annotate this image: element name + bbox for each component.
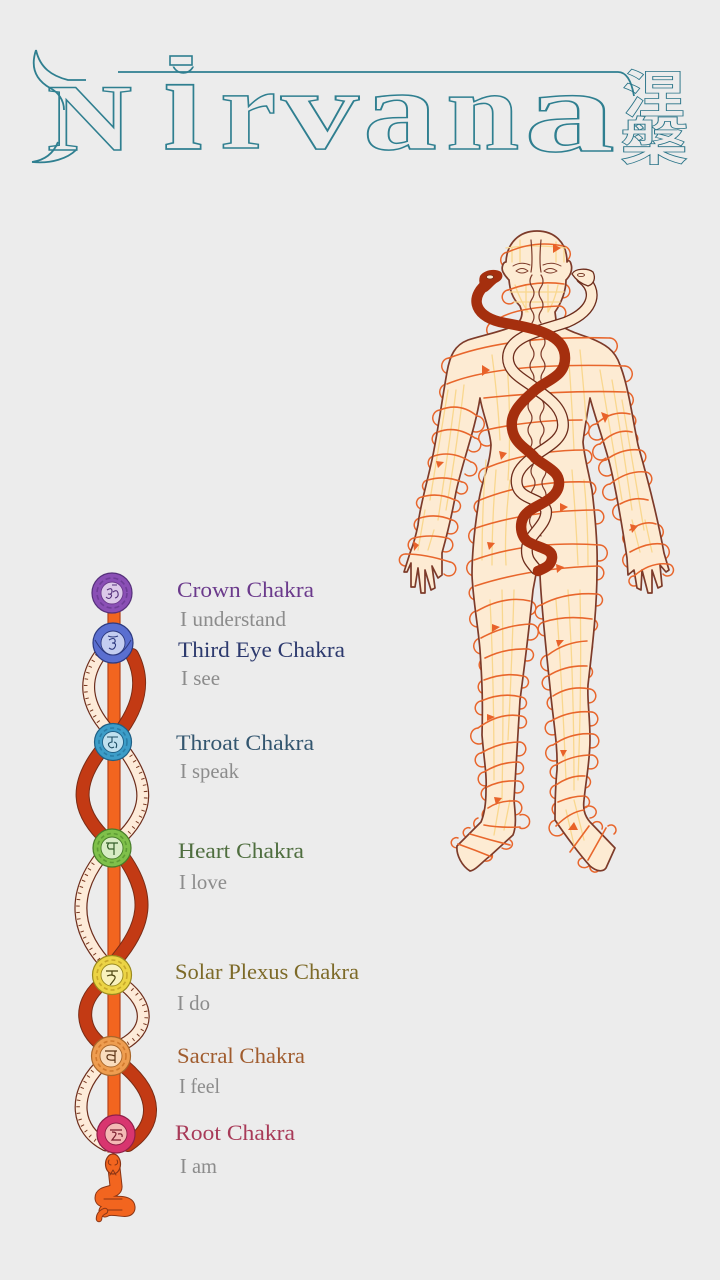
title: Chinese characters: 涅 (622, 53, 685, 128)
title: Nirvana (32, 50, 635, 164)
icon: heart chakra (93, 829, 131, 867)
orange flow arrows (413, 244, 638, 830)
title: Nirvana: N (47, 67, 132, 171)
body silhouette (404, 231, 669, 871)
chakra column (78, 573, 150, 1219)
orange coil lines (406, 244, 668, 860)
coil loops behind the body (399, 246, 673, 872)
label: crown chakra: Crown Chakra (177, 577, 314, 602)
label: throat chakra: I speak (180, 759, 239, 783)
title: Nirvana: r (220, 48, 276, 173)
icon: third eye chakra (93, 623, 133, 663)
figure: human body with energy channels (399, 231, 673, 872)
icon: throat chakra (94, 724, 132, 760)
central channel (528, 240, 546, 536)
label: heart chakra: I love (179, 870, 227, 894)
label: root chakra: I am (180, 1154, 217, 1178)
dark strands (83, 655, 150, 1145)
label: solar plexus chakra: I do (177, 991, 210, 1015)
label: solar plexus chakra: Solar Plexus Chakra (175, 959, 359, 984)
light strands (81, 655, 143, 1145)
light snake (508, 269, 594, 569)
label: third eye chakra: Third Eye Chakra (178, 637, 345, 662)
yellow meridian lines (418, 240, 652, 845)
central channel bar (108, 600, 120, 1152)
icon: root chakra (97, 1115, 135, 1153)
label: throat chakra: Throat Chakra (176, 730, 314, 755)
dark snake (477, 270, 565, 571)
title: Nirvana: a (363, 47, 437, 174)
title: Chinese characters: 槃 (620, 101, 688, 175)
title: Chinese characters (620, 53, 688, 175)
label: crown chakra (177, 577, 314, 631)
label: root chakra: Root Chakra (175, 1120, 295, 1145)
label: throat chakra (176, 730, 314, 783)
label: sacral chakra: Sacral Chakra (177, 1043, 305, 1068)
title: Nirvana: v (281, 48, 360, 173)
label: third eye chakra: I see (181, 666, 220, 690)
label: solar plexus chakra (175, 959, 359, 1015)
icon: coiled serpent (99, 1154, 129, 1219)
label: heart chakra: Heart Chakra (178, 838, 304, 863)
label: third eye chakra (178, 637, 345, 690)
label: heart chakra (178, 838, 304, 894)
icon: solar plexus chakra (92, 956, 132, 994)
label: root chakra (175, 1120, 295, 1178)
title: Nirvana: i (163, 24, 203, 180)
label: crown chakra: I understand (180, 607, 287, 631)
label: sacral chakra (177, 1043, 305, 1098)
title: Nirvana: n (446, 49, 519, 174)
icon: crown chakra (92, 573, 132, 613)
title: Nirvana: a (524, 46, 615, 177)
face details (513, 263, 561, 273)
label: sacral chakra: I feel (179, 1074, 220, 1098)
icon: sacral chakra (92, 1036, 130, 1076)
